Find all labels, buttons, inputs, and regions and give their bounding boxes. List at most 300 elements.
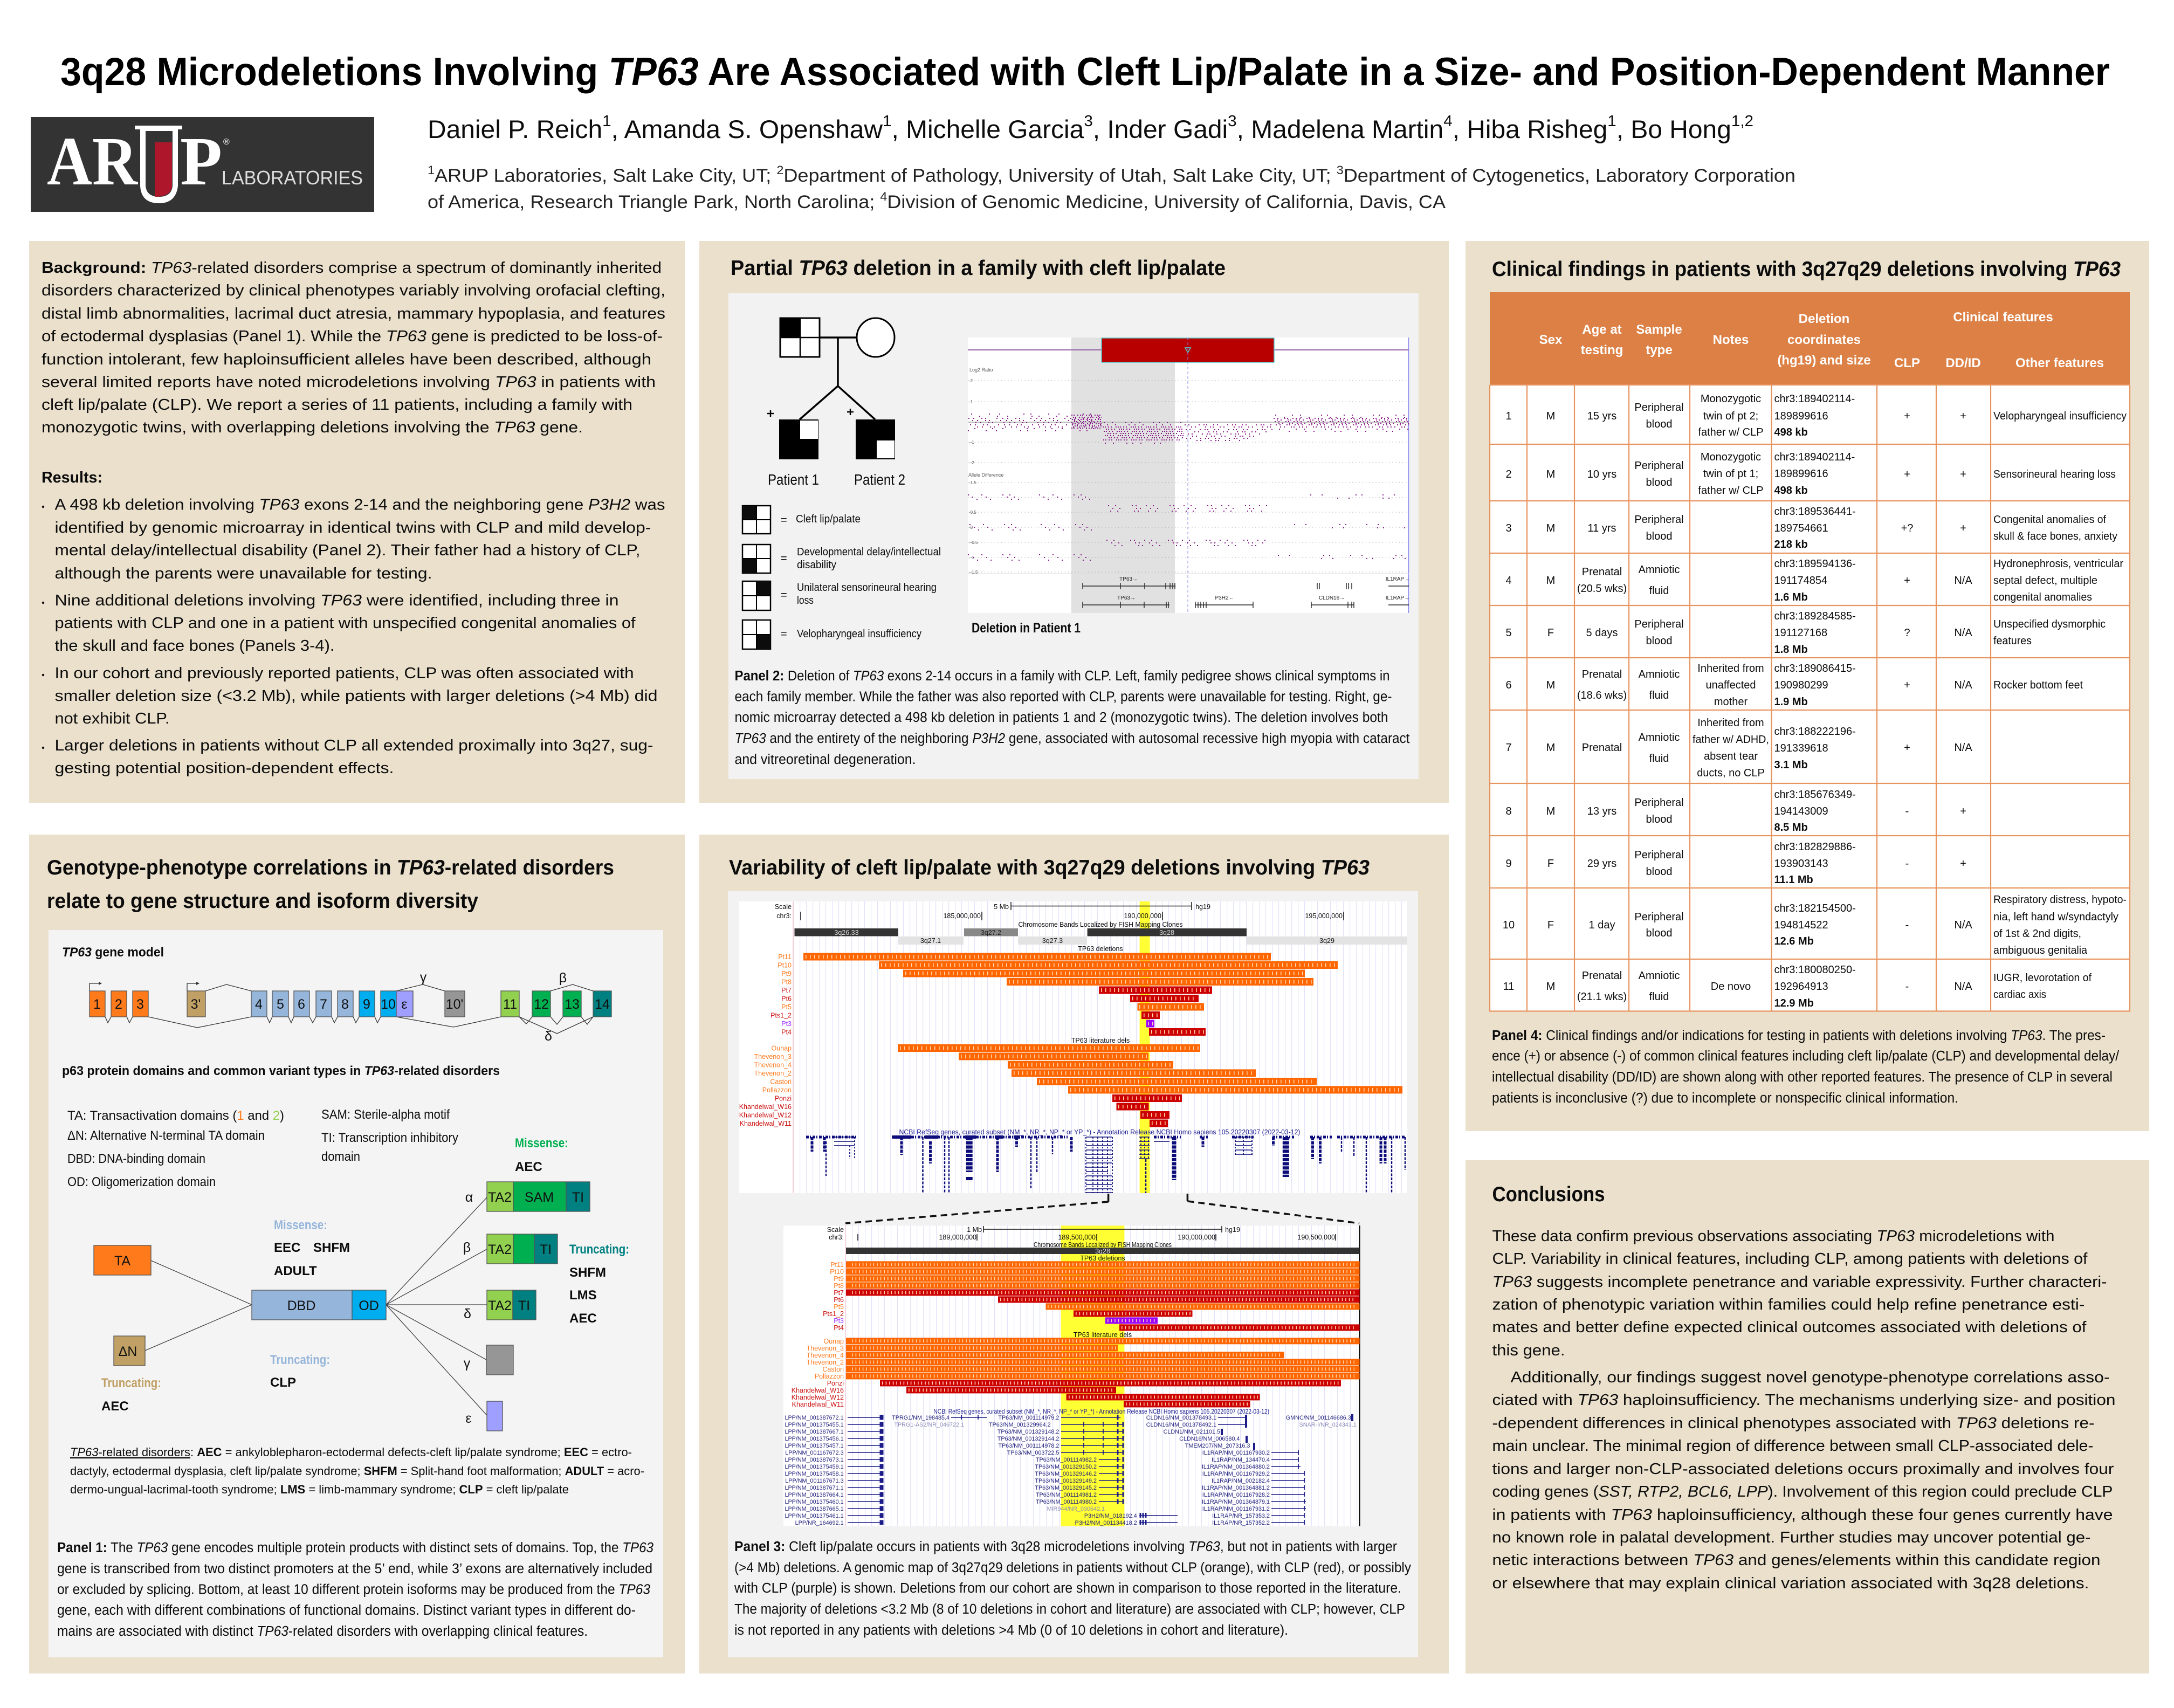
table rows: ? <box>1904 627 1910 639</box>
table header: Notes <box>1713 333 1749 347</box>
zoomed gene annotations: TP63/NM_001329144.2 <box>997 1436 1059 1442</box>
table rows: absent tear <box>1704 750 1758 762</box>
table rows: 9 <box>1505 858 1512 870</box>
table rows: chr3:189402114- <box>1774 451 1855 463</box>
zoomed gene annotations: TP63/NM_001329149.2 <box>1035 1478 1097 1484</box>
table header: Clinical features <box>1953 310 2053 325</box>
table rows: Monozygotic <box>1701 393 1761 405</box>
disorders footnote: dactyly, ectodermal dysplasia, cleft lip/palate syndrome; SHFM = Split-hand foot malformation; ADULT = acro- <box>70 1464 644 1478</box>
variant labels: Truncating: <box>270 1353 330 1367</box>
panel: partial TP63 deletion in a family <box>699 241 1449 803</box>
table rows: 1.6 Mb <box>1774 591 1808 603</box>
genome browser: overview: 190,000,000 <box>1124 912 1161 920</box>
table <box>1490 292 2130 1011</box>
pedigree legend: Velopharyngeal insufficiency <box>797 628 921 640</box>
zoomed gene annotations: TP63/NM_001329964.2 <box>989 1422 1051 1428</box>
table rows: 5 days <box>1586 627 1618 639</box>
chromosome bands: 3q27.2 <box>981 929 1001 936</box>
panel 2 caption: Panel 2: Deletion of TP63 exons 2-14 occurs in a family with CLP. Left, family pedigree shows clinical symptoms in <box>734 669 1390 684</box>
results list: smaller deletion size (<3.2 Mb), while patients with larger deletions (>4 Mb) did <box>55 687 658 705</box>
table rows: IUGR, levorotation of <box>1993 972 2092 984</box>
results list: identified by genomic microarray in identical twins with CLP and mild develop- <box>55 519 651 536</box>
microarray plot: --2 <box>969 460 974 465</box>
pedigree legend: = <box>781 553 787 564</box>
table rows: chr3:189536441- <box>1774 506 1856 518</box>
affiliations <box>428 163 1795 212</box>
variant labels: ADULT <box>274 1264 317 1278</box>
table header: CLP <box>1894 356 1920 370</box>
table rows: 4 <box>1505 575 1512 587</box>
domain legend: DBD: DNA-binding domain <box>67 1152 205 1166</box>
table rows: 191174854 <box>1774 575 1827 587</box>
table rows: chr3:182829886- <box>1774 841 1856 853</box>
table rows: 11.1 Mb <box>1774 874 1813 886</box>
conclusions text: no known role in palatal development. Further studies may uncover potential ge- <box>1492 1529 2091 1546</box>
table rows: N/A <box>1954 981 1972 993</box>
zoomed cohort tracks: Pt5 <box>834 1303 844 1311</box>
table rows: M <box>1546 469 1555 480</box>
logo: ARUP Laboratories: P <box>180 123 222 199</box>
table rows: Inherited from <box>1697 663 1764 674</box>
genome browser: zoomed region: 190,500,000 <box>1297 1234 1335 1241</box>
table header: Deletion <box>1799 312 1849 326</box>
pedigree legend: = <box>781 628 787 640</box>
isoform domain diagram: δ <box>464 1306 471 1321</box>
table rows: 191339618 <box>1774 742 1828 754</box>
panel 1 caption: gene, each with different combinations of functional domains. Distinct variant types in different do- <box>57 1603 636 1618</box>
panel 4 caption <box>1492 1028 2120 1106</box>
table rows: Peripheral <box>1634 849 1684 861</box>
table rows: chr3:189284585- <box>1774 610 1856 622</box>
table rows: + <box>1904 679 1910 691</box>
table rows: of 1st & 2nd digits, <box>1993 928 2081 940</box>
panel 1 caption: or excluded by splicing. Bottom, at least 10 different protein isoforms may be produced from the TP63 <box>57 1582 650 1597</box>
table rows: M <box>1546 575 1555 587</box>
conclusions text: zation of phenotypic variation within families could help refine penetrance esti- <box>1492 1296 2084 1313</box>
table rows: father w/ ADHD, <box>1693 734 1769 746</box>
authors: , Inder Gadi <box>1093 115 1228 143</box>
table rows: 189899616 <box>1774 468 1828 480</box>
background text: several limited reports have noted microdeletions involving TP63 in patients with <box>42 374 656 391</box>
table rows: F <box>1547 858 1554 870</box>
isoform domain diagram: α <box>465 1190 473 1205</box>
table rows: Peripheral <box>1634 460 1684 472</box>
zoomed gene annotations: GMNC/NM_001146686.3 <box>1286 1415 1351 1421</box>
pedigree legend: Developmental delay/intellectual <box>797 546 941 558</box>
domain legend: ΔN: Alternative N-terminal TA domain <box>67 1128 265 1143</box>
affiliations: 3 <box>1337 163 1344 177</box>
panel 2 caption: TP63 and the entirety of the neighboring P3H2 gene, associated with autosomal recessive high myopia with cataract <box>734 731 1409 746</box>
table header: Sex <box>1539 333 1563 347</box>
zoomed cohort tracks: Pt7 <box>834 1289 844 1297</box>
zoomed gene annotations: LPP/NM_001387671.1 <box>785 1485 844 1491</box>
zoomed gene annotations: TP63/NM_001114981.2 <box>1036 1492 1097 1498</box>
domain legend: TI: Transcription inhibitory <box>321 1131 458 1145</box>
TP63 gene model diagram: 9 <box>363 997 370 1012</box>
results list: Larger deletions in patients without CLP all extended proximally into 3q27, sug- <box>55 737 653 754</box>
disorders footnote <box>70 1445 644 1496</box>
zoomed gene annotations: LPP/NM_001375460.1 <box>785 1499 844 1505</box>
zoomed gene annotations: TP63/NM_003722.5 <box>1007 1450 1059 1456</box>
zoomed gene annotations: LPP/NM_001387665.1 <box>785 1506 844 1512</box>
table rows: 192964913 <box>1774 981 1828 993</box>
TP63 gene model diagram: 3' <box>191 997 201 1012</box>
results list: although the parents were unavailable for testing. <box>55 565 432 582</box>
conclusions text: These data confirm previous observations associating TP63 microdeletions with <box>1492 1228 2054 1245</box>
heading: Conclusions <box>1492 1183 1605 1206</box>
table header: DD/ID <box>1945 356 1981 370</box>
microarray plot <box>968 338 1409 636</box>
genome browser: zoomed region: 189,000,000 <box>939 1234 976 1241</box>
TP63 gene model diagram: 14 <box>595 997 610 1012</box>
zoomed cohort tracks: Pt3 <box>834 1317 844 1325</box>
zoomed literature tracks <box>792 1338 1360 1408</box>
authors: 4 <box>1443 113 1453 130</box>
zoomed gene annotations: LPP/NM_001167672.3 <box>785 1450 844 1456</box>
background text: disorders characterized by clinical phenotypes variably involving orofacial clefting, <box>42 282 665 299</box>
genome browser: overview: 5 Mb <box>994 903 1009 911</box>
table rows: (21.1 wks) <box>1577 991 1627 1003</box>
background text: function intolerant, few haploinsufficient alleles have been described, although <box>42 351 651 368</box>
genome browser: overview: Scale <box>775 903 792 911</box>
table rows: 10 yrs <box>1587 469 1616 480</box>
table rows: 15 yrs <box>1587 410 1616 422</box>
zoomed gene annotations: LPP/NM_001375458.1 <box>785 1471 844 1477</box>
table rows: chr3:185676349- <box>1774 789 1856 801</box>
literature deletion tracks: Thevenon_2 <box>754 1070 792 1077</box>
isoform domain diagram: ε <box>465 1411 472 1426</box>
results list: A 498 kb deletion involving TP63 exons 2-14 and the neighboring gene P3H2 was <box>55 496 665 513</box>
background text: cleft lip/palate (CLP). We report a series of 11 patients, including a family with <box>42 396 632 414</box>
variant labels: LMS <box>569 1288 597 1303</box>
table rows: M <box>1546 981 1555 993</box>
panel 2 caption <box>734 669 1409 767</box>
panel 3 caption: The majority of deletions <3.2 Mb (8 of 10 deletions in cohort and literature) are associated with CLP; however, CLP <box>734 1602 1405 1617</box>
protein domains heading: p63 protein domains and common variant types in TP63-related disorders <box>62 1064 500 1078</box>
TP63 gene model diagram: γ <box>420 970 427 985</box>
authors: , Madelena Martin <box>1237 115 1443 143</box>
pedigree legend: loss <box>797 595 814 607</box>
microarray plot: -2 <box>969 378 973 383</box>
genome browser: overview <box>739 901 1407 1193</box>
zoomed gene annotations: LPP/NR_164692.1 <box>795 1520 844 1526</box>
genome browser: overview: 195,000,000 <box>1305 912 1343 920</box>
zoomed cohort tracks <box>823 1261 1360 1332</box>
table rows: Prenatal <box>1582 742 1622 754</box>
cohort deletion tracks: Pt4 <box>781 1029 792 1036</box>
table rows: Prenatal <box>1582 566 1622 578</box>
zoomed gene annotations: LPP/NM_001387664.1 <box>785 1492 844 1498</box>
TP63 gene model diagram: 4 <box>255 997 263 1012</box>
panel 4 caption: ence (+) or absence (-) of common clinical features including cleft lip/palate (CLP) and developmental delay/ <box>1492 1049 2120 1064</box>
gene model heading: TP63 gene model <box>62 945 164 960</box>
zoom connector lines <box>845 1194 1359 1223</box>
literature deletion tracks: Thevenon_3 <box>754 1053 792 1060</box>
table header: coordinates <box>1787 333 1861 347</box>
zoomed gene annotations: TP63/NM_001114980.2 <box>1036 1499 1097 1505</box>
authors: 1 <box>1607 113 1616 130</box>
table rows: M <box>1546 805 1555 817</box>
authors: Daniel P. Reich <box>428 115 599 143</box>
panel 1 caption: gene is transcribed from two distinct promoters at the 5’ end, while 3’ exons are alternatively included <box>57 1561 652 1576</box>
table rows: F <box>1547 919 1554 931</box>
disorders footnote: dermo-ungual-lacrimal-tooth syndrome; LMS = limb-mammary syndrome; CLP = cleft lip/palate <box>70 1483 569 1496</box>
variant labels: AEC <box>101 1399 129 1414</box>
table rows: ambiguous genitalia <box>1993 945 2088 956</box>
table rows: 29 yrs <box>1587 858 1616 870</box>
zoomed gene annotations: TP63/NM_001329150.2 <box>1035 1464 1097 1470</box>
genome browser: zoomed region: chr3: <box>829 1234 844 1241</box>
table rows: 190980299 <box>1774 679 1828 691</box>
table rows: 13 yrs <box>1587 805 1616 817</box>
microarray plot: CLDN16→ <box>1319 595 1345 601</box>
variant labels <box>101 1136 629 1414</box>
microarray plot: --1 <box>969 555 974 560</box>
table rows: blood <box>1646 418 1672 430</box>
table rows: blood <box>1646 866 1672 878</box>
table rows: + <box>1904 469 1910 480</box>
TP63 gene model diagram: 11 <box>503 997 517 1012</box>
microarray plot: --0.5 <box>969 540 978 545</box>
table rows: 189754661 <box>1774 522 1828 534</box>
isoform domain diagram: TA <box>114 1254 130 1269</box>
zoomed gene annotations: P3H2/NM_001134418.2 <box>1075 1520 1137 1526</box>
TP63 gene model diagram: 8 <box>341 997 349 1012</box>
table rows: N/A <box>1954 679 1972 691</box>
table rows: 498 kb <box>1774 426 1808 438</box>
table rows: Amniotic <box>1639 732 1680 743</box>
zoomed gene annotations: TP63/NM_001329145.2 <box>1035 1485 1097 1491</box>
logo: ARUP Laboratories: ® <box>223 137 230 147</box>
table header: Other features <box>2015 356 2104 370</box>
variant labels: SHFM <box>313 1241 350 1255</box>
table rows: 1 <box>1505 410 1512 422</box>
microarray plot: Allele Difference <box>968 472 1003 478</box>
results list: In our cohort and previously reported patients, CLP was often associated with <box>55 665 634 682</box>
table rows: N/A <box>1954 742 1972 754</box>
table rows: chr3:182154500- <box>1774 903 1856 914</box>
literature deletion tracks <box>739 1044 1402 1127</box>
results list: gesting potential position-dependent effects. <box>55 760 394 777</box>
panel 3 caption <box>734 1539 1411 1638</box>
panel 3 caption: (>4 Mb) deletions. A genomic map of 3q27q29 deletions in patients without CLP (orange), with CLP (red), or possibly <box>734 1560 1411 1575</box>
zoomed cohort tracks: Pt8 <box>834 1282 844 1290</box>
microarray plot: -0 <box>969 525 973 530</box>
zoomed gene annotations: TP63/NM_001329146.2 <box>1035 1471 1097 1477</box>
table header <box>1539 310 2104 370</box>
table rows: Velopharyngeal insufficiency <box>1993 410 2127 422</box>
table rows: 10 <box>1503 919 1515 931</box>
variant labels: Missense: <box>274 1218 327 1232</box>
table rows: chr3:180080250- <box>1774 964 1856 976</box>
authors: 1,2 <box>1731 113 1753 130</box>
zoomed gene annotations: CLDN1/NM_021101.5 <box>1164 1429 1220 1435</box>
table rows: 218 kb <box>1774 539 1808 550</box>
zoomed gene annotations: LPP/NM_001375457.1 <box>785 1443 844 1449</box>
table header: type <box>1646 343 1673 357</box>
chromosome bands <box>795 928 1407 945</box>
table rows: 3 <box>1505 522 1512 534</box>
isoform domain diagram: γ <box>464 1356 471 1371</box>
authors: , Hiba Risheg <box>1453 115 1607 143</box>
table rows: chr3:188222196- <box>1774 726 1856 738</box>
isoform domain diagram: TI <box>540 1242 552 1257</box>
zoomed gene annotations: TP63/NM_001114982.2 <box>1036 1457 1097 1463</box>
table rows: 12.6 Mb <box>1774 935 1814 947</box>
zoomed gene annotations: MIR944/NR_030642.1 <box>1047 1506 1105 1512</box>
genome browser: zoomed region: Chromosome Bands Localized by FISH Mapping Clones <box>1034 1241 1172 1249</box>
table rows: 194143009 <box>1774 805 1828 817</box>
conclusions text: tions and larger non-CLP-associated deletions occurs proximally and involves four <box>1492 1461 2114 1478</box>
variant labels: AEC <box>569 1311 597 1326</box>
zoomed gene annotations: IL1RAP/NM_002182.4 <box>1212 1478 1270 1484</box>
table rows: Peripheral <box>1634 402 1684 414</box>
table rows: blood <box>1646 927 1672 939</box>
table rows: twin of pt 2; <box>1703 410 1758 422</box>
results list: patients with CLP and one in a patient with unspecified congenital anomalies of <box>55 615 636 632</box>
logo: ARUP Laboratories: AR <box>47 123 138 199</box>
table rows: M <box>1546 742 1555 754</box>
table rows: fluid <box>1649 585 1669 597</box>
table rows: Prenatal <box>1582 970 1622 982</box>
isoform domain diagram: TA2 <box>488 1242 512 1257</box>
zoomed cohort tracks: Pt9 <box>834 1275 844 1283</box>
conclusions text: netic interactions between TP63 and genes/elements within this candidate region <box>1492 1552 2101 1569</box>
table rows: Rocker bottom feet <box>1993 679 2083 691</box>
zoomed gene annotations: TPRG1-AS2/NR_046722.1 <box>894 1422 964 1428</box>
table rows: Congenital anomalies of <box>1993 514 2106 526</box>
microarray plot: TP63→ <box>1117 595 1136 601</box>
TP63 gene model diagram: 2 <box>115 997 122 1012</box>
variant labels: Missense: <box>515 1136 568 1151</box>
TP63 gene model diagram: β <box>559 970 567 986</box>
isoform domain diagram: TA2 <box>488 1298 512 1313</box>
results list: not exhibit CLP. <box>55 710 169 727</box>
isoform domain diagram: TI <box>572 1190 584 1205</box>
cohort deletion tracks: Pt8 <box>781 978 792 986</box>
results list: the skull and face bones (Panels 3-4). <box>55 637 334 655</box>
zoomed literature tracks: Pollazzon <box>815 1373 844 1380</box>
table rows: 191127168 <box>1774 627 1827 639</box>
literature deletion tracks: Khandelwal_W11 <box>740 1120 792 1127</box>
table rows: M <box>1546 522 1555 534</box>
zoomed gene annotations: CLDN16/NM_001378492.1 <box>1146 1422 1216 1428</box>
microarray plot: --1 <box>969 440 974 445</box>
panel 3 caption: is not reported in any patients with deletions >4 Mb (0 of 10 deletions in cohort and literature). <box>734 1623 1288 1638</box>
table rows: skull & face bones, anxiety <box>1993 531 2117 542</box>
conclusions text: mates and better define expected clinical outcomes associated with deletions of <box>1492 1319 2087 1336</box>
panel 3 caption: with CLP (purple) is shown. Deletions from our cohort are shown in comparison to those reported in the literature. <box>734 1581 1401 1596</box>
panel 1 caption: mains are associated with distinct TP63-related disorders with overlapping clinical features. <box>57 1624 588 1639</box>
panel 4 caption: Panel 4: Clinical findings and/or indications for testing in patients with deletions involving TP63. The pres- <box>1492 1028 2106 1043</box>
table rows: Peripheral <box>1634 911 1684 923</box>
pedigree legend: = <box>781 589 787 601</box>
pedigree legend: = <box>781 514 787 526</box>
panel: clinical findings table <box>1466 241 2149 1131</box>
cohort deletion tracks: Pt10 <box>778 962 792 969</box>
family pedigree: Patient 2 <box>854 471 905 488</box>
table rows: + <box>1960 469 1966 480</box>
heading: Genotype-phenotype correlations in TP63-related disorders <box>47 856 614 879</box>
table rows: + <box>1904 410 1910 422</box>
zoomed literature tracks: Khandelwal_W11 <box>792 1401 844 1408</box>
chromosome bands: 3q27.1 <box>920 937 941 945</box>
affiliations: of America, Research Triangle Park, North Carolina; <box>428 192 849 212</box>
TP63 gene model diagram: 5 <box>277 997 284 1012</box>
title: 3q28 Microdeletions Involving TP63 Are Associated with Cleft Lip/Palate in a Size- and Position-Dependent Manner <box>60 50 2110 94</box>
table rows: fluid <box>1649 991 1669 1003</box>
domain legend: domain <box>321 1149 360 1164</box>
affiliations: 1 <box>428 163 435 177</box>
variant labels: Truncating: <box>101 1376 161 1390</box>
isoform domain diagram: DBD <box>287 1298 315 1313</box>
conclusions text <box>1492 1228 2116 1592</box>
table rows: - <box>1905 805 1909 817</box>
microarray plot: P3H2← <box>1215 595 1234 601</box>
results list <box>42 496 665 777</box>
TP63 gene model diagram: 3 <box>136 997 144 1012</box>
table rows: - <box>1905 981 1909 993</box>
table rows: blood <box>1646 635 1672 647</box>
zoomed gene annotations: IL1RAP/NM_001364880.2 <box>1202 1464 1270 1470</box>
literature deletion tracks: Pollazzon <box>762 1086 792 1094</box>
heading <box>47 856 614 913</box>
cohort deletion tracks <box>770 953 1338 1036</box>
zoomed gene annotations: IL1RAP/NM_001364879.1 <box>1202 1499 1270 1505</box>
table rows: + <box>1960 805 1966 817</box>
table rows: blood <box>1646 531 1672 542</box>
isoform domain diagram: SAM <box>525 1190 554 1205</box>
zoomed gene annotations: LPP/NM_001387667.1 <box>785 1429 844 1435</box>
table rows: 498 kb <box>1774 485 1808 497</box>
family pedigree: Patient 1 <box>768 471 819 488</box>
microarray plot: --1.5 <box>969 570 978 575</box>
literature deletion tracks: Ponzi <box>775 1094 792 1102</box>
family pedigree <box>767 318 905 488</box>
variant labels: AEC <box>515 1160 542 1174</box>
conclusions text: or elsewhere that may explain clinical variation associated with 3q28 deletions. <box>1492 1575 2089 1592</box>
microarray plot: -1 <box>969 400 973 404</box>
panel 1 caption <box>57 1540 653 1639</box>
zoomed literature tracks: Ponzi <box>827 1380 844 1387</box>
microarray data points <box>968 414 1409 560</box>
pedigree legend: disability <box>797 559 836 571</box>
table rows: M <box>1546 410 1555 422</box>
pedigree legend: Unilateral sensorineural hearing <box>797 582 937 594</box>
isoform domain diagram: TI <box>518 1298 530 1313</box>
table header: (hg19) and size <box>1777 353 1871 368</box>
logo: ARUP Laboratories <box>31 117 374 212</box>
table rows: blood <box>1646 814 1672 825</box>
genome browser: zoomed region: 3q28 <box>1095 1248 1110 1255</box>
disorders footnote: TP63-related disorders: AEC = ankyloblepharon-ectodermal defects-cleft lip/palate syndrome; EEC = ectro- <box>70 1445 632 1459</box>
RefSeq gene track <box>806 1128 1405 1193</box>
zoomed literature tracks: Castori <box>822 1366 844 1373</box>
genome browser: zoomed region: hg19 <box>1225 1226 1240 1234</box>
zoomed gene annotations: IL1RAP/NR_157353.2 <box>1212 1513 1270 1519</box>
chromosome bands: 3q26.33 <box>834 929 859 936</box>
zoomed gene annotations: IL1RAP/NM_134470.4 <box>1212 1457 1270 1463</box>
affiliations: 2 <box>776 163 783 177</box>
cohort deletion tracks: Pt3 <box>781 1020 792 1028</box>
authors: 3 <box>1084 113 1093 130</box>
table rows: mother <box>1714 696 1748 708</box>
genome browser: overview: hg19 <box>1195 903 1210 911</box>
table rows: 5 <box>1505 627 1512 639</box>
zoomed cohort tracks: Pt6 <box>834 1296 844 1304</box>
table rows: Sensorineural hearing loss <box>1993 469 2116 480</box>
table rows: N/A <box>1954 627 1972 639</box>
